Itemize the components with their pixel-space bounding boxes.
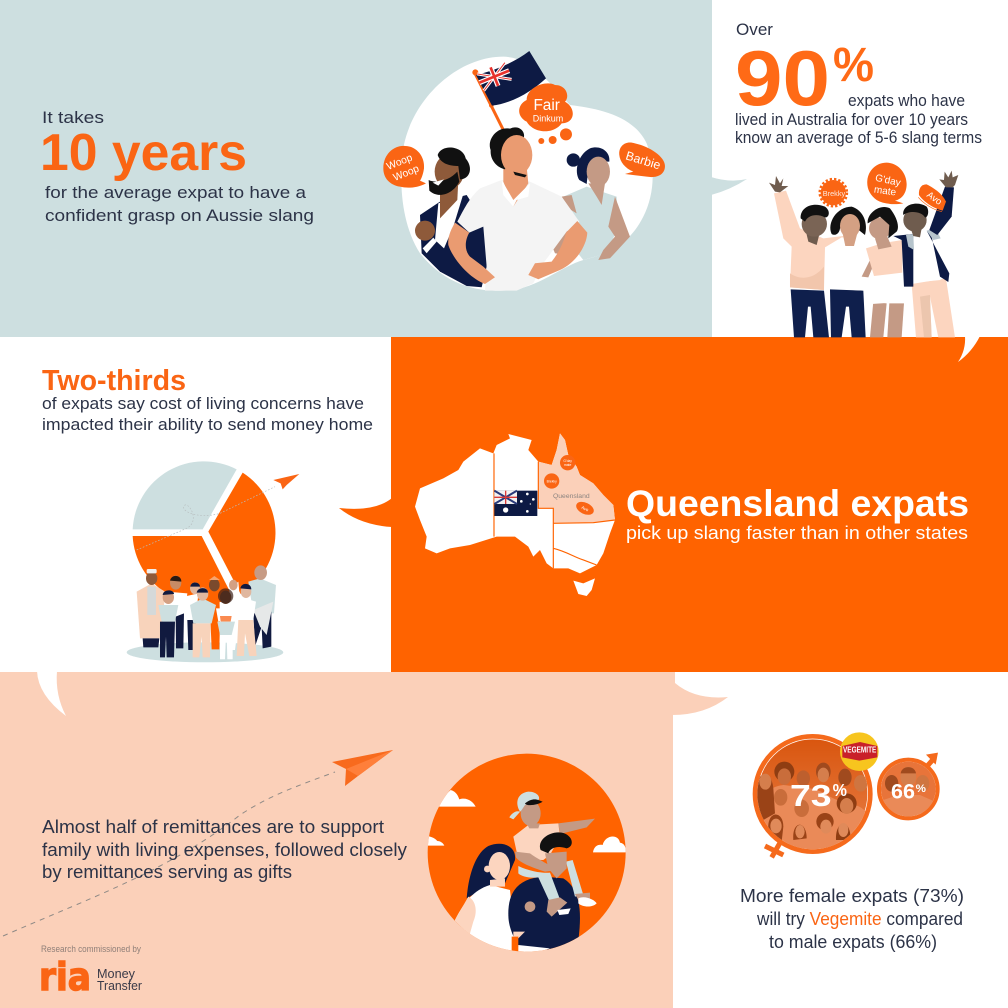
white speech tail in orange band bbox=[958, 336, 980, 362]
map flag bbox=[494, 491, 537, 516]
panel: remittances peach background bbox=[0, 672, 673, 1008]
speech bubble: Brekky: Brekky bbox=[823, 189, 846, 198]
speech bubble: Woop Woop: Woop bbox=[392, 163, 421, 184]
illustration: map of Australia bbox=[415, 433, 615, 596]
illustration: family in orange circle bbox=[427, 754, 626, 955]
text block: research credit: Research commissioned by bbox=[41, 944, 141, 955]
panel: top-left slang background bbox=[0, 0, 712, 337]
logo: ria Money Transfer: Transfer bbox=[97, 978, 143, 993]
person: friend two bbox=[825, 207, 867, 337]
panel: top-right speech tail bbox=[711, 177, 747, 195]
text block: two-thirds: Two-thirds bbox=[42, 365, 186, 397]
text block: over 90 percent: % bbox=[833, 39, 874, 92]
paper plane with dashed trail bbox=[3, 750, 393, 936]
speech bubble: G'day mate: G'day bbox=[874, 173, 902, 189]
speech bubble: Woop Woop: Woop bbox=[385, 152, 414, 173]
text block: two-thirds bbox=[42, 365, 373, 434]
text block: Vegemite comparison: will try Vegemite compared bbox=[756, 909, 963, 929]
text block: over 90 percent: expats who have bbox=[848, 91, 965, 110]
text block: 10 years: confident grasp on Aussie slang bbox=[45, 206, 314, 225]
label 73 percent: % bbox=[833, 780, 847, 800]
map mainland bbox=[415, 433, 615, 573]
speech bubble: Brekky bbox=[820, 179, 847, 206]
illustration: pie chart with crowd bbox=[127, 461, 299, 662]
family figures bbox=[450, 792, 597, 955]
person: friend one bbox=[769, 176, 844, 337]
speech bubble: G'day mate bbox=[867, 163, 907, 204]
label 66 percent: % bbox=[916, 783, 926, 795]
person: friend three bbox=[862, 207, 907, 337]
paper plane with dashed trail bbox=[137, 474, 299, 550]
Vegemite badge bbox=[840, 732, 879, 771]
thought bubble: Fair Dinkum bbox=[519, 83, 573, 144]
speech bubble: Avo bbox=[918, 184, 946, 212]
map state borders bbox=[494, 453, 615, 568]
map slang bubbles and label: Brekky bbox=[547, 479, 557, 483]
speech bubble: G'day mate: mate bbox=[873, 185, 897, 199]
text block: over 90 percent bbox=[735, 20, 982, 147]
map Tasmania bbox=[573, 578, 595, 596]
person: friend four bbox=[893, 171, 958, 337]
thought bubble: Fair Dinkum: Fair bbox=[533, 97, 560, 114]
text block: remittances: family with living expenses, followed closely bbox=[42, 840, 407, 860]
map slang bubbles and label bbox=[544, 455, 596, 517]
white speech tail in peach panel bbox=[37, 671, 66, 716]
illustration: four friends waving bbox=[769, 163, 958, 337]
text block: Vegemite comparison bbox=[740, 886, 964, 952]
logo: ria Money Transfer: ria bbox=[39, 955, 91, 999]
label 73 percent: 73 bbox=[790, 778, 832, 813]
label 73 percent bbox=[790, 778, 847, 813]
panel: orange speech tail bbox=[339, 498, 392, 527]
illustration: Vegemite comparison circles bbox=[753, 732, 938, 857]
map slang bubbles and label: G'day bbox=[563, 459, 572, 463]
illustration: three expats with flag bbox=[383, 51, 665, 291]
thought bubble: Fair Dinkum: Dinkum bbox=[533, 113, 563, 123]
text block: Queensland expats bbox=[626, 483, 969, 543]
text block: two-thirds: of expats say cost of living concerns have bbox=[42, 394, 364, 413]
text block: over 90 percent: Over bbox=[736, 20, 773, 39]
person: central man in white shirt bbox=[448, 127, 587, 291]
text block: Vegemite comparison: More female expats (73%) bbox=[740, 886, 964, 906]
text block: remittances: Almost half of remittances are to support bbox=[42, 817, 384, 837]
male circle with faces bbox=[879, 753, 938, 820]
text block: 10 years: It takes bbox=[42, 108, 104, 127]
text block: remittances bbox=[42, 817, 407, 882]
text block: over 90 percent: lived in Australia for over 10 years bbox=[735, 110, 968, 129]
speech bubble: Barbie: Barbie bbox=[624, 149, 662, 172]
text block: over 90 percent: know an average of 5-6 slang terms bbox=[735, 128, 982, 147]
speech bubble: Avo: Avo bbox=[925, 190, 944, 207]
text block: 10 years: 10 years bbox=[40, 124, 247, 182]
text block: remittances: by remittances serving as gifts bbox=[42, 862, 292, 882]
text block: 10 years bbox=[40, 108, 314, 225]
label 66 percent bbox=[891, 780, 926, 804]
text block: two-thirds: impacted their ability to send money home bbox=[42, 415, 373, 434]
shadow under crowd bbox=[127, 642, 283, 662]
peach speech tail bbox=[672, 672, 728, 715]
map slang bubbles and label: Avo bbox=[581, 505, 590, 513]
clouds bbox=[427, 790, 626, 852]
crowd of expats bbox=[137, 565, 276, 659]
logo: ria Money Transfer: Money bbox=[97, 966, 135, 981]
text block: 10 years: for the average expat to have a bbox=[45, 183, 307, 202]
orange circle backdrop bbox=[428, 754, 626, 952]
text block: Vegemite comparison: to male expats (66%) bbox=[769, 932, 937, 952]
speech bubble: Barbie bbox=[619, 142, 665, 177]
text block: Queensland expats: pick up slang faster than in other states bbox=[626, 523, 968, 543]
white blob backdrop bbox=[401, 57, 653, 291]
label 66 percent: 66 bbox=[891, 780, 915, 804]
speech bubble: Woop Woop bbox=[383, 146, 426, 188]
Vegemite badge: VEGEMITE bbox=[843, 746, 877, 755]
map slang bubbles and label: Queensland bbox=[553, 493, 590, 500]
female circle with faces bbox=[753, 735, 872, 853]
pie chart: two-thirds split bbox=[133, 461, 275, 604]
person: woman on the right bbox=[547, 147, 630, 260]
panel: Queensland orange band bbox=[391, 337, 1008, 672]
map slang bubbles and label: mate bbox=[564, 463, 571, 467]
map Queensland region bbox=[538, 433, 615, 523]
text block: Queensland expats: Queensland expats bbox=[626, 483, 969, 524]
text block: over 90 percent: 90 bbox=[735, 34, 830, 122]
female symbol bbox=[765, 842, 783, 857]
flag bbox=[472, 51, 546, 130]
person: bearded man on the left bbox=[415, 148, 487, 287]
logo: ria Money Transfer bbox=[39, 955, 143, 999]
